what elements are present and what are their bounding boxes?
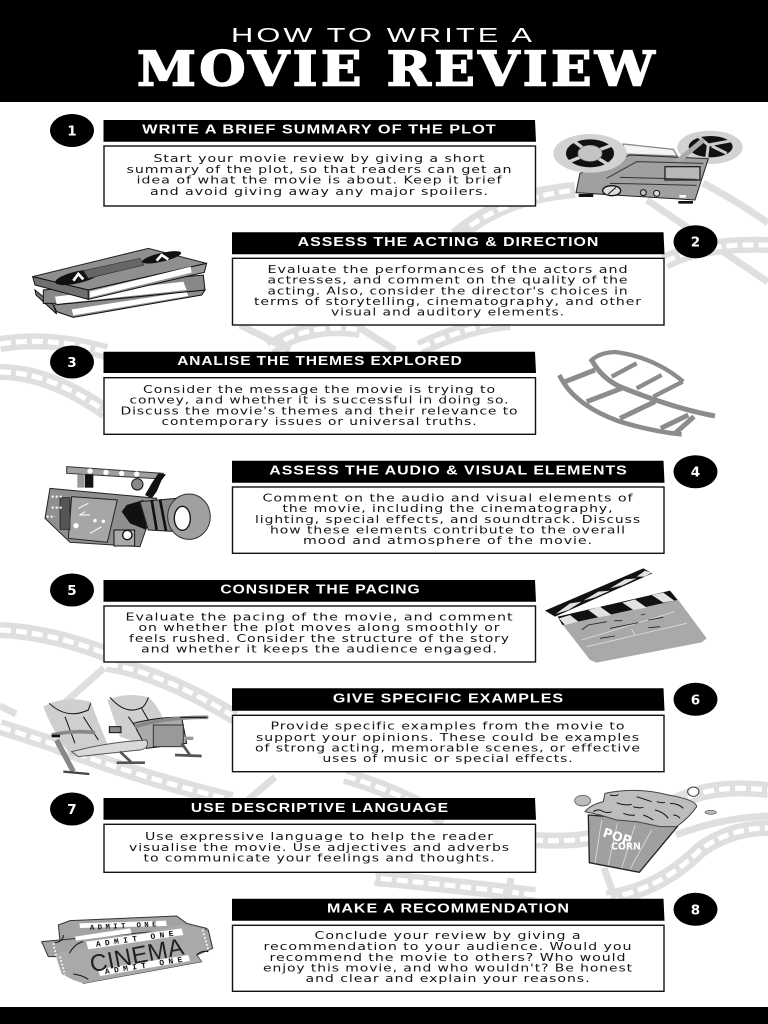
step 2 [232, 225, 718, 325]
step 8 [232, 893, 718, 991]
step 4: how these elements contribute to the overall [270, 524, 626, 536]
step 2: Evaluate the performances of the actors and [268, 264, 628, 276]
icon: cinema seats [43, 695, 208, 774]
step 6 [232, 683, 718, 772]
step 3 [50, 346, 536, 434]
background: film strips [0, 183, 768, 898]
icon: film projector [553, 131, 743, 204]
icon: film strip [559, 352, 715, 434]
step 7: Use expressive language to help the reader [145, 831, 494, 843]
icon: cinema tickets: ADMIT ONE [95, 930, 174, 950]
step 6: support your opinions. These could be examples [256, 732, 640, 744]
icon: cinema tickets [42, 916, 213, 983]
step 1: WRITE A BRIEF SUMMARY OF THE PLOT [142, 121, 497, 136]
icon: popcorn [575, 787, 716, 872]
icon: VHS tapes [33, 248, 207, 317]
step 5: and whether it keeps the audience engaged. [141, 644, 498, 656]
step 3: contemporary issues or universal truths. [162, 416, 478, 428]
icon: popcorn: POP [601, 825, 634, 848]
footer band [0, 1007, 768, 1024]
icon: popcorn: CORN [611, 841, 641, 852]
title [137, 25, 658, 98]
step 7: 7 [67, 802, 77, 818]
step 2: ASSESS THE ACTING & DIRECTION [298, 234, 599, 249]
step 8: and clear and explain your reasons. [306, 973, 590, 985]
step 5: on whether the plot moves along smoothly or [138, 622, 500, 634]
step 2: actresses, and comment on the quality of the [268, 275, 628, 287]
step 5: 5 [67, 583, 77, 599]
step 7: to communicate your feelings and thoughts. [144, 852, 496, 864]
step 8: recommend the movie to others? Who would [270, 952, 626, 964]
step 4: lighting, special effects, and soundtrack. Discuss [255, 514, 641, 526]
icon: video camera [45, 467, 210, 547]
step 5 [50, 574, 536, 662]
step 4: mood and atmosphere of the movie. [303, 535, 593, 547]
icon: cinema tickets: CINEMA [88, 934, 186, 978]
step 1: idea of what the movie is about. Keep it brief [136, 174, 502, 186]
step 4: ASSESS THE AUDIO & VISUAL ELEMENTS [269, 462, 628, 477]
step 8: Conclude your review by giving a [314, 930, 582, 942]
step 5: feels rushed. Consider the structure of the story [129, 633, 510, 645]
step 6: uses of music or special effects. [322, 753, 574, 765]
step 6: GIVE SPECIFIC EXAMPLES [333, 691, 564, 706]
step 2: terms of storytelling, cinematography, and other [254, 296, 642, 308]
step 4: Comment on the audio and visual elements of [262, 492, 634, 504]
step 8: 8 [691, 902, 700, 918]
icon: clapperboard [545, 568, 707, 663]
step 1: summary of the plot, so that readers can get an [126, 164, 512, 176]
header band [0, 0, 768, 102]
step 1: 1 [67, 124, 77, 140]
step 6: 6 [691, 692, 700, 708]
step 2: visual and auditory elements. [331, 307, 565, 319]
step 7 [50, 792, 536, 872]
step 8: recommendation to your audience. Would you [264, 941, 632, 953]
step 7: USE DESCRIPTIVE LANGUAGE [191, 800, 449, 815]
title: HOW TO WRITE A [231, 25, 535, 47]
step 1: Start your movie review by giving a short [154, 153, 486, 165]
step 4: the movie, including the cinematography, [282, 503, 614, 515]
step 1: and avoid giving away any major spoilers. [150, 186, 489, 198]
step 1 [50, 114, 536, 206]
step 6: Provide specific examples from the movie to [270, 720, 626, 732]
step 2: acting. Also, consider the director's choices in [268, 285, 628, 297]
step 3: 3 [67, 355, 77, 371]
step 8: MAKE A RECOMMENDATION [327, 900, 570, 915]
step 5: Evaluate the pacing of the movie, and comment [126, 612, 514, 624]
step 6: of strong acting, memorable scenes, or effective [255, 742, 641, 754]
step 3: Discuss the movie's themes and their relevance to [120, 405, 518, 417]
icon: cinema tickets: ADMIT ONE [104, 956, 183, 977]
step 3: Consider the message the movie is trying to [143, 384, 496, 396]
step 4 [232, 455, 718, 553]
icon: cinema tickets: ADMIT ONE [90, 921, 157, 933]
step 5: CONSIDER THE PACING [220, 581, 421, 596]
step 8: enjoy this movie, and who wouldn't? Be honest [263, 962, 633, 974]
title: MOVIE REVIEW [137, 42, 658, 98]
step 3: convey, and whether it is successful in doing so. [130, 395, 510, 407]
step 4: 4 [691, 465, 700, 481]
step 3: ANALISE THE THEMES EXPLORED [177, 353, 463, 368]
step 7: visualise the movie. Use adjectives and adverbs [129, 842, 510, 854]
step 2: 2 [691, 235, 700, 251]
